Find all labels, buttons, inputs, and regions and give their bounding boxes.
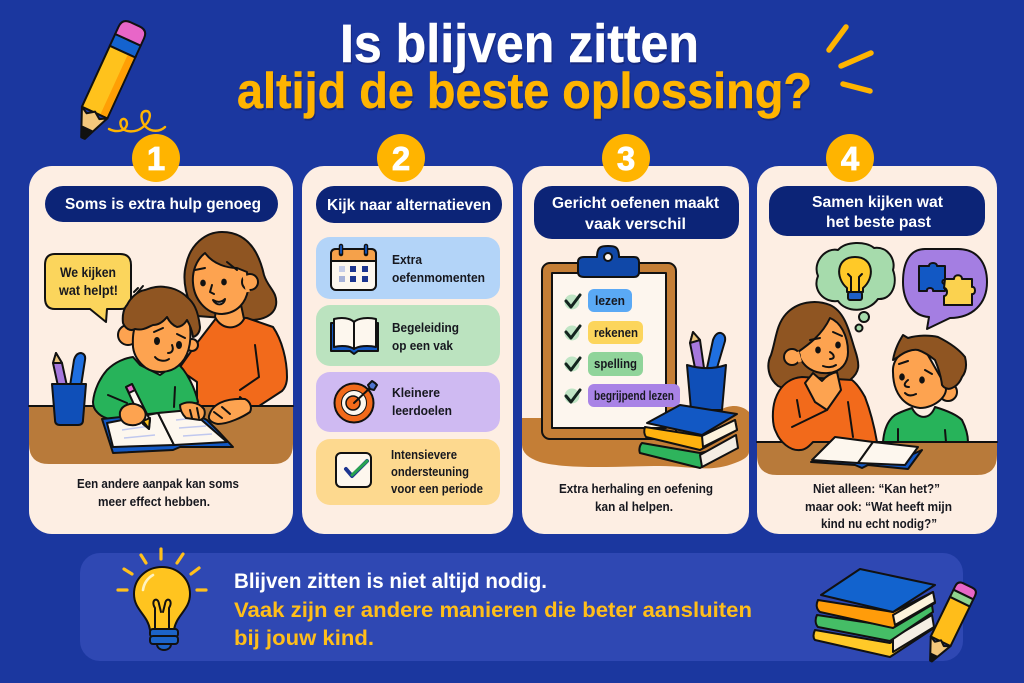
row: extra practice: Extra (392, 252, 423, 267)
illustration: pencil cup (687, 332, 726, 410)
callout: speech bubble: We kijken (60, 265, 116, 280)
illustration: child writing (93, 286, 251, 453)
row: intensive support: voor een periode (391, 481, 483, 496)
closing message: Vaak zijn er andere manieren die beter aansluiten (234, 598, 752, 622)
panel: card 1 (29, 134, 293, 534)
row: subject support: Begeleiding (392, 320, 459, 335)
row: subject support: op een vak (392, 338, 454, 353)
title: altijd de beste oplossing? (237, 63, 812, 119)
number badge 4: 4 (841, 140, 860, 177)
icon: books and pencil (814, 569, 978, 666)
illustration: mother helping child (180, 232, 287, 410)
table (522, 406, 749, 468)
icon: pencil squiggle (109, 111, 165, 131)
row: smaller goals: Kleinere (392, 385, 440, 400)
closing message: Blijven zitten is niet altijd nodig. (234, 569, 547, 593)
illustration: thinking mother (768, 302, 877, 450)
number badge 3: 3 (617, 140, 635, 177)
closing message: bij jouw kind. (234, 626, 374, 650)
icon: pencil (70, 19, 148, 144)
caption: card 4: maar ook: “Wat heeft mijn (805, 499, 952, 514)
panel: card 4 (757, 134, 997, 534)
caption: card 1: Een andere aanpak kan soms (77, 476, 239, 491)
row: intensive support: Intensievere (391, 447, 457, 462)
table (29, 406, 293, 464)
title: Is blijven zitten (340, 14, 699, 74)
heading: card 2 (316, 186, 502, 223)
caption: card 3 (559, 481, 713, 514)
caption: card 4 (805, 481, 952, 531)
number badge 4 (826, 134, 874, 182)
heading: card 4: Samen kijken wat (812, 194, 943, 211)
table (757, 442, 997, 475)
illustration: speech bubble with puzzle (903, 249, 987, 329)
illustration: clipboard checklist: lezen (595, 293, 625, 308)
illustration: clipboard checklist: spelling (594, 356, 637, 371)
heading: card 3 (534, 186, 739, 239)
title: altijd de beste oplossing? (238, 65, 813, 121)
caption: card 4: Niet alleen: “Kan het?” (813, 481, 940, 496)
caption: card 3: Extra herhaling en oefening (559, 481, 713, 496)
callout: speech bubble (45, 254, 131, 322)
row: intensive support (316, 439, 500, 505)
row: extra practice (316, 237, 500, 299)
heading: card 4: het beste past (826, 214, 931, 231)
illustration: open book (811, 437, 922, 469)
number badge 2 (377, 134, 425, 182)
row: smaller goals (316, 372, 500, 432)
panel: bottom banner (80, 549, 978, 666)
closing message (234, 569, 752, 650)
caption: card 4: kind nu echt nodig?” (821, 516, 937, 531)
icon: light bulb (118, 549, 206, 650)
number badge 1 (132, 134, 180, 182)
row: subject support (316, 305, 500, 366)
heading: card 3: vaak verschil (585, 216, 686, 233)
illustration: clipboard checklist: begrijpend lezen (594, 388, 674, 403)
row: extra practice: oefenmomenten (392, 270, 485, 285)
illustration: pencil cup (52, 353, 86, 425)
caption: card 3: kan al helpen. (595, 499, 673, 514)
title (237, 14, 813, 121)
heading: card 4 (769, 186, 985, 236)
heading: card 1: Soms is extra hulp genoeg (65, 196, 261, 213)
illustration: clipboard checklist (542, 246, 680, 439)
caption: card 1 (77, 476, 239, 509)
illustration: clipboard checklist: rekenen (594, 325, 638, 340)
illustration: book stack (639, 405, 738, 468)
heading: card 3: Gericht oefenen maakt (552, 195, 719, 212)
number badge 3 (602, 134, 650, 182)
panel: card 3 (522, 134, 749, 534)
number badge 2: 2 (392, 140, 410, 177)
illustration: child looking up (883, 335, 968, 442)
row: intensive support: ondersteuning (391, 464, 469, 479)
heading: card 2: Kijk naar alternatieven (327, 197, 491, 214)
callout: speech bubble: wat helpt! (58, 283, 118, 298)
panel: card 2 (302, 134, 513, 534)
title: Is blijven zitten (341, 16, 700, 76)
number badge 1: 1 (147, 140, 165, 177)
caption: card 1: meer effect hebben. (98, 494, 210, 509)
illustration: thought bubble with bulb (816, 243, 895, 332)
heading: card 1 (45, 186, 278, 222)
icon: sparkle lines (829, 27, 871, 91)
row: smaller goals: leerdoelen (392, 403, 452, 418)
